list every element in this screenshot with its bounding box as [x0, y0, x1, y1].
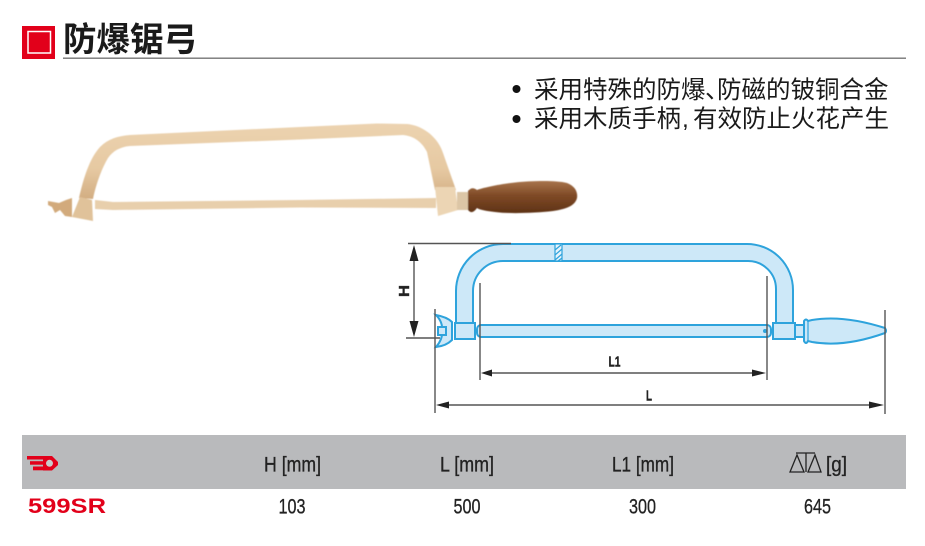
dimension L	[435, 309, 885, 414]
dimension L1: L1	[608, 354, 620, 370]
product photo: hacksaw	[48, 124, 577, 221]
feature bullet list: 、	[705, 77, 730, 104]
value: L1: 300	[629, 496, 656, 518]
feature bullet list: 采用木质手柄	[534, 106, 681, 133]
saw frame	[79, 124, 456, 199]
header: weight with scale icon: [g]	[826, 454, 847, 476]
product code: 599SR	[28, 494, 107, 518]
feature bullet list: ,	[682, 106, 689, 133]
feature bullet list	[512, 76, 889, 133]
value: L: 500	[454, 496, 480, 518]
feature bullet list: 防磁的铍铜合金	[717, 76, 888, 104]
icon: red brand logo	[27, 456, 58, 470]
blade pin	[763, 329, 767, 333]
dimension H	[396, 244, 511, 338]
wing nut	[48, 198, 72, 217]
table header bar	[22, 435, 906, 489]
ferrule	[457, 192, 469, 210]
technical drawing: blue hacksaw	[436, 244, 886, 347]
ferrule	[795, 325, 804, 337]
header: L: L [mm]	[440, 454, 494, 476]
left collar	[72, 197, 93, 221]
feature bullet list: 采用特殊的防爆	[534, 77, 706, 104]
wing nut	[436, 315, 452, 347]
dimension H: H	[396, 285, 413, 297]
blue handle	[804, 318, 886, 344]
left collar	[455, 323, 475, 339]
blue frame	[456, 244, 793, 323]
wooden handle	[468, 181, 577, 213]
title: 防爆锯弓	[63, 22, 197, 59]
value: H: 103	[278, 496, 306, 518]
dimension L1	[480, 276, 767, 380]
saw blade	[95, 198, 436, 210]
right collar	[773, 323, 795, 339]
dimension L: L	[646, 388, 652, 404]
header: H: H [mm]	[264, 454, 321, 476]
value: weight: 645	[804, 496, 831, 518]
feature bullet list: 有效防止火花产生	[693, 105, 889, 133]
header: weight with scale icon	[790, 453, 847, 476]
right collar	[435, 187, 458, 216]
icon: red square section marker	[22, 26, 55, 59]
title rule	[63, 58, 906, 59]
hatch	[555, 244, 562, 261]
header: L1: L1 [mm]	[612, 454, 674, 476]
blue blade	[477, 325, 771, 337]
